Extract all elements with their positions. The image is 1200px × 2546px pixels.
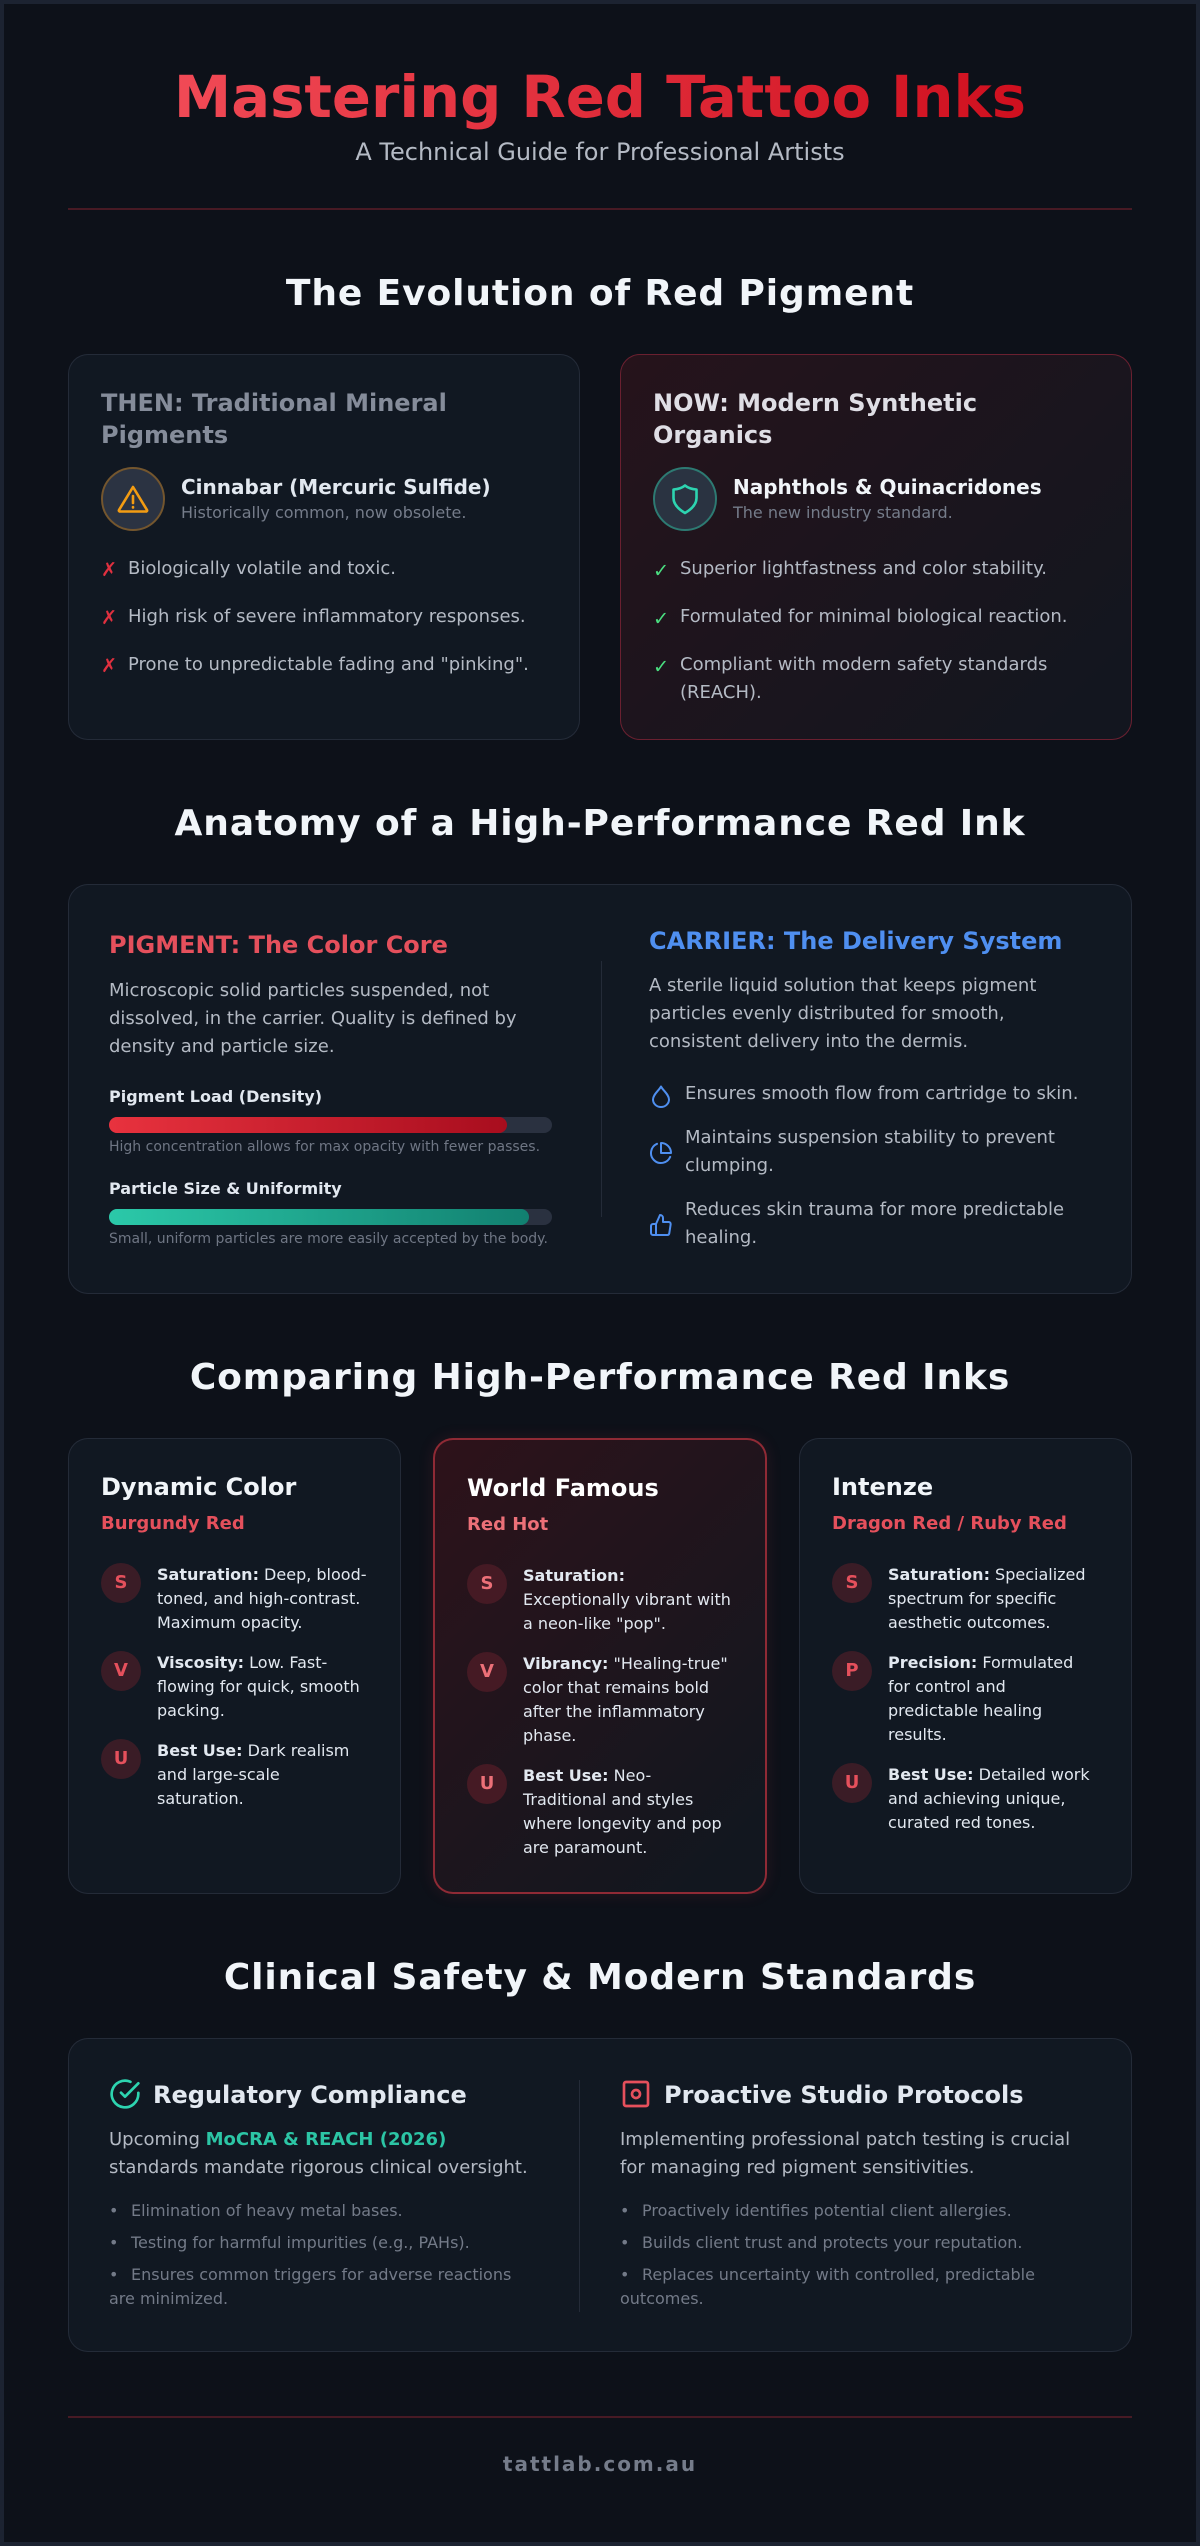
badge S xyxy=(101,1563,141,1603)
saturation: toned, and high-contrast. xyxy=(157,1589,360,1608)
best use xyxy=(888,1765,1090,1832)
protocols bullet 3: outcomes. xyxy=(620,2289,704,2308)
vibrancy: after the inflammatory xyxy=(523,1702,705,1721)
badge U xyxy=(101,1739,141,1779)
badge S: S xyxy=(846,1572,858,1593)
protocols text: for managing red pigment sensitivities. xyxy=(620,2157,975,2178)
carrier point 2: clumping. xyxy=(685,1155,774,1176)
regulatory text: standards mandate rigorous clinical oversight. xyxy=(109,2157,528,2178)
viscosity: Viscosity: Low. Fast- xyxy=(157,1653,327,1672)
naphthols note: The new industry standard. xyxy=(733,503,953,522)
carrier point 3: healing. xyxy=(685,1227,757,1248)
badge P: P xyxy=(845,1660,859,1681)
badge V xyxy=(467,1652,507,1692)
badge V: V xyxy=(480,1661,494,1682)
best use: where longevity and pop xyxy=(523,1814,722,1833)
pigment description: density and particle size. xyxy=(109,1036,335,1057)
saturation: spectrum for specific xyxy=(888,1589,1056,1608)
precision: results. xyxy=(888,1725,947,1744)
product name: Dragon Red / Ruby Red xyxy=(832,1513,1067,1534)
badge S xyxy=(467,1564,507,1604)
item 2: Formulated for minimal biological reaction. xyxy=(680,606,1068,627)
product name: Red Hot xyxy=(467,1514,548,1535)
best use xyxy=(157,1741,349,1808)
subtitle: A Technical Guide for Professional Artists xyxy=(355,138,845,166)
best use: saturation. xyxy=(157,1789,244,1808)
protocols bullet 2: • xyxy=(620,2233,629,2252)
vibrancy: color that remains bold xyxy=(523,1678,709,1697)
viscosity: flowing for quick, smooth xyxy=(157,1677,360,1696)
header divider xyxy=(68,208,1132,210)
badge U xyxy=(832,1763,872,1803)
precision: for control and xyxy=(888,1677,1006,1696)
item 2: High risk of severe inflammatory responses. xyxy=(128,606,526,627)
saturation: Saturation: xyxy=(523,1566,625,1585)
precision: Precision: Formulated xyxy=(888,1653,1073,1672)
carrier point 2 xyxy=(685,1127,1055,1176)
protocols text: Implementing professional patch testing is crucial xyxy=(620,2129,1070,2150)
caption: High concentration allows for max opacity with fewer passes. xyxy=(109,1139,540,1155)
bar xyxy=(109,1209,552,1225)
cross mark 3: ✗ xyxy=(101,654,117,677)
badge P xyxy=(832,1651,872,1691)
regulatory bullet 3: are minimized. xyxy=(109,2289,228,2308)
cinnabar name: Cinnabar (Mercuric Sulfide) xyxy=(181,475,491,499)
carrier description xyxy=(649,975,1036,1052)
protocols bullet 3: Replaces uncertainty with controlled, predictable xyxy=(642,2265,1035,2284)
protocols bullet 1: Proactively identifies potential client allergies. xyxy=(642,2201,1012,2220)
badge S: S xyxy=(115,1572,127,1593)
panel: now xyxy=(620,354,1132,740)
heading: comparing: Comparing High-Performance Red Inks xyxy=(190,1357,1010,1398)
badge U: U xyxy=(480,1773,494,1794)
then title: THEN: Traditional Mineral xyxy=(101,389,447,417)
regulatory bullet 3: • xyxy=(109,2265,118,2284)
item 3: (REACH). xyxy=(680,682,762,703)
panel: safety xyxy=(68,2038,1132,2352)
then list xyxy=(101,558,529,677)
carrier point 3 xyxy=(685,1199,1064,1248)
badge S xyxy=(832,1563,872,1603)
regulatory bullet 3 xyxy=(109,2265,511,2308)
now title: Organics xyxy=(653,421,772,449)
now list xyxy=(653,558,1068,703)
regulatory bullet 2: • xyxy=(109,2233,118,2252)
precision: predictable healing xyxy=(888,1701,1042,1720)
badge U: U xyxy=(114,1748,128,1769)
footer: tattlab.com.au xyxy=(503,2452,697,2476)
saturation: Maximum opacity. xyxy=(157,1613,302,1632)
best use xyxy=(522,1766,722,1857)
carrier title: CARRIER: The Delivery System xyxy=(649,927,1062,955)
icon: thumbs up xyxy=(650,1214,672,1236)
cinnabar note: Historically common, now obsolete. xyxy=(181,503,466,522)
item 3: Prone to unpredictable fading and "pinking". xyxy=(128,654,529,675)
metric: pigment load xyxy=(109,1087,552,1155)
brand name: Intenze xyxy=(832,1473,933,1501)
heading: anatomy: Anatomy of a High-Performance Red Ink xyxy=(175,803,1025,844)
brand name: World Famous xyxy=(467,1474,659,1502)
saturation: aesthetic outcomes. xyxy=(888,1613,1050,1632)
pigment title: PIGMENT: The Color Core xyxy=(109,931,448,959)
viscosity: packing. xyxy=(157,1701,225,1720)
metric: particle size xyxy=(109,1179,552,1247)
now title xyxy=(653,389,977,449)
icon: droplet xyxy=(652,1086,670,1108)
pigment description: Microscopic solid particles suspended, not xyxy=(109,980,489,1001)
naphthols name: Naphthols & Quinacridones xyxy=(733,475,1042,499)
pigment description xyxy=(109,980,517,1057)
saturation: Saturation: Specialized xyxy=(888,1565,1086,1584)
precision xyxy=(888,1653,1073,1744)
panel: then xyxy=(68,354,580,740)
regulatory title: Regulatory Compliance xyxy=(153,2081,467,2109)
caption: Small, uniform particles are more easily accepted by the body. xyxy=(109,1231,548,1247)
title: Mastering Red Tattoo Inks xyxy=(174,64,1026,131)
badge V xyxy=(101,1651,141,1691)
cross mark 2: ✗ xyxy=(101,606,117,629)
carrier point 2: Maintains suspension stability to prevent xyxy=(685,1127,1055,1148)
icon: pie chart xyxy=(650,1142,672,1164)
saturation xyxy=(157,1565,366,1632)
best use: Best Use: Dark realism xyxy=(157,1741,349,1760)
icon: check circle xyxy=(110,2079,140,2109)
vibrancy: phase. xyxy=(523,1726,576,1745)
best use: and large-scale xyxy=(157,1765,280,1784)
saturation xyxy=(523,1566,731,1633)
protocols bullet 3: • xyxy=(620,2265,629,2284)
regulatory bullet 2: Testing for harmful impurities (e.g., PAHs). xyxy=(131,2233,470,2252)
icon: patch test square xyxy=(622,2080,650,2108)
icon: shield xyxy=(653,467,717,531)
check mark 1: ✓ xyxy=(653,559,669,582)
heading: safety: Clinical Safety & Modern Standards xyxy=(224,1957,976,1998)
badge U: U xyxy=(845,1772,859,1793)
regulatory bullet 1: • xyxy=(109,2201,118,2220)
badge U xyxy=(467,1764,507,1804)
protocols text xyxy=(620,2129,1070,2178)
saturation: a neon-like "pop". xyxy=(523,1614,666,1633)
bar xyxy=(109,1117,552,1133)
item 1: Superior lightfastness and color stability. xyxy=(680,558,1047,579)
check mark 2: ✓ xyxy=(653,607,669,630)
saturation xyxy=(888,1565,1086,1632)
badge V: V xyxy=(114,1660,128,1681)
best use: Traditional and styles xyxy=(523,1790,693,1809)
best use: Best Use: Neo- xyxy=(523,1766,651,1785)
carrier point 1: Ensures smooth flow from cartridge to skin. xyxy=(685,1083,1078,1104)
label: Particle Size & Uniformity xyxy=(109,1179,342,1198)
icon: warning xyxy=(101,467,165,531)
item 3: Compliant with modern safety standards xyxy=(680,654,1047,675)
saturation: Exceptionally vibrant with xyxy=(523,1590,731,1609)
label: Pigment Load (Density) xyxy=(109,1087,322,1106)
best use: are paramount. xyxy=(523,1838,647,1857)
panel: dynamic color xyxy=(68,1438,401,1894)
protocols bullet 2: Builds client trust and protects your reputation. xyxy=(642,2233,1023,2252)
best use: and achieving unique, xyxy=(888,1789,1065,1808)
now title: NOW: Modern Synthetic xyxy=(653,389,977,417)
item 1: Biologically volatile and toxic. xyxy=(128,558,396,579)
regulatory bullet 1: Elimination of heavy metal bases. xyxy=(131,2201,403,2220)
cross mark 1: ✗ xyxy=(101,558,117,581)
heading: evolution: The Evolution of Red Pigment xyxy=(286,273,914,314)
protocols bullet 1: • xyxy=(620,2201,629,2220)
best use: Best Use: Detailed work xyxy=(888,1765,1090,1784)
carrier description: consistent delivery into the dermis. xyxy=(649,1031,968,1052)
vibrancy xyxy=(523,1654,728,1745)
panel: intenze xyxy=(799,1438,1132,1894)
check mark 3: ✓ xyxy=(653,655,669,678)
regulatory text xyxy=(109,2129,528,2178)
best use: curated red tones. xyxy=(888,1813,1035,1832)
protocols bullet 3 xyxy=(620,2265,1035,2308)
pigment description: dissolved, in the carrier. Quality is defined by xyxy=(109,1008,517,1029)
then title xyxy=(101,389,447,449)
protocols title: Proactive Studio Protocols xyxy=(664,2081,1024,2109)
brand name: Dynamic Color xyxy=(101,1473,296,1501)
then title: Pigments xyxy=(101,421,228,449)
saturation: Saturation: Deep, blood- xyxy=(157,1565,366,1584)
badge S: S xyxy=(481,1573,493,1594)
item 3 xyxy=(680,654,1047,703)
regulatory bullet 3: Ensures common triggers for adverse reactions xyxy=(131,2265,511,2284)
vibrancy: Vibrancy: "Healing-true" xyxy=(523,1654,728,1673)
carrier description: A sterile liquid solution that keeps pigment xyxy=(649,975,1036,996)
carrier description: particles evenly distributed for smooth, xyxy=(649,1003,1005,1024)
product name: Burgundy Red xyxy=(101,1513,245,1534)
panel: anatomy xyxy=(68,884,1132,1294)
carrier point 3: Reduces skin trauma for more predictable xyxy=(685,1199,1064,1220)
regulatory text: Upcoming MoCRA & REACH (2026) xyxy=(109,2129,446,2150)
panel: world famous xyxy=(433,1438,767,1894)
viscosity xyxy=(157,1653,360,1720)
